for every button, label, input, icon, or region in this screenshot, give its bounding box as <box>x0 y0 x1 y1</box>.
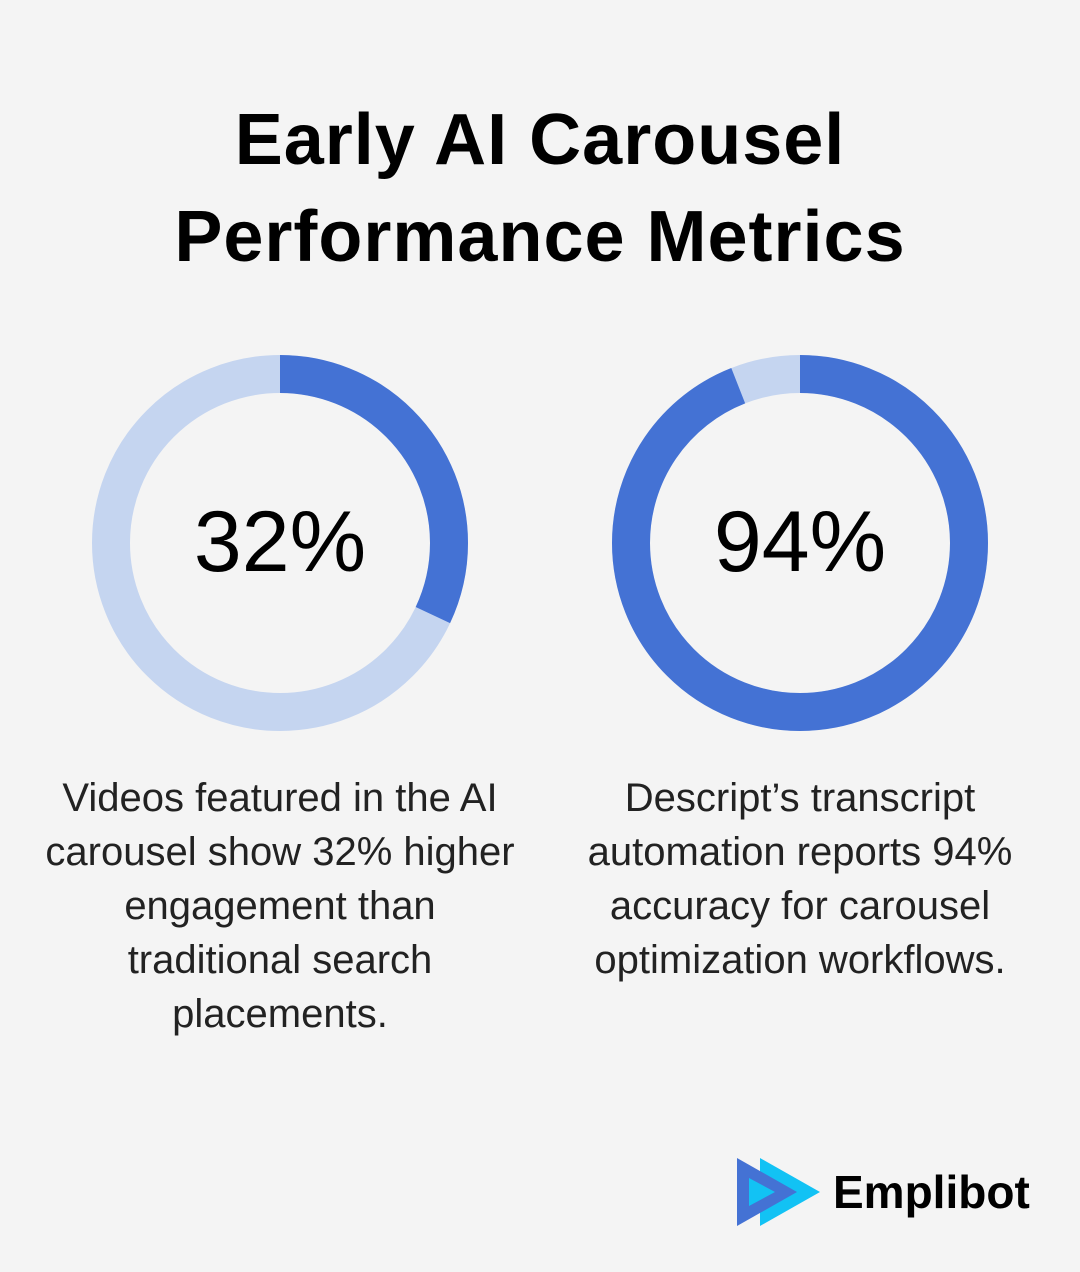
title <box>174 100 906 277</box>
title: Performance Metrics <box>174 197 906 277</box>
logo: Emplibot <box>737 1158 1030 1226</box>
donut chart: 32% <box>92 355 468 731</box>
donut chart: 32%: 32% <box>194 494 366 590</box>
donut chart: 94% <box>612 355 988 731</box>
title: Early AI Carousel <box>235 100 845 180</box>
logo: Emplibot: Emplibot <box>833 1166 1030 1218</box>
text: 32% description: Videos featured in the AI carousel show 32% higher engagement than traditional search placements. <box>45 776 515 1036</box>
donut chart: 94%: 94% <box>714 494 886 590</box>
text: 94% description: Descript’s transcript automation reports 94% accuracy for carousel optimization workflows. <box>588 776 1012 982</box>
